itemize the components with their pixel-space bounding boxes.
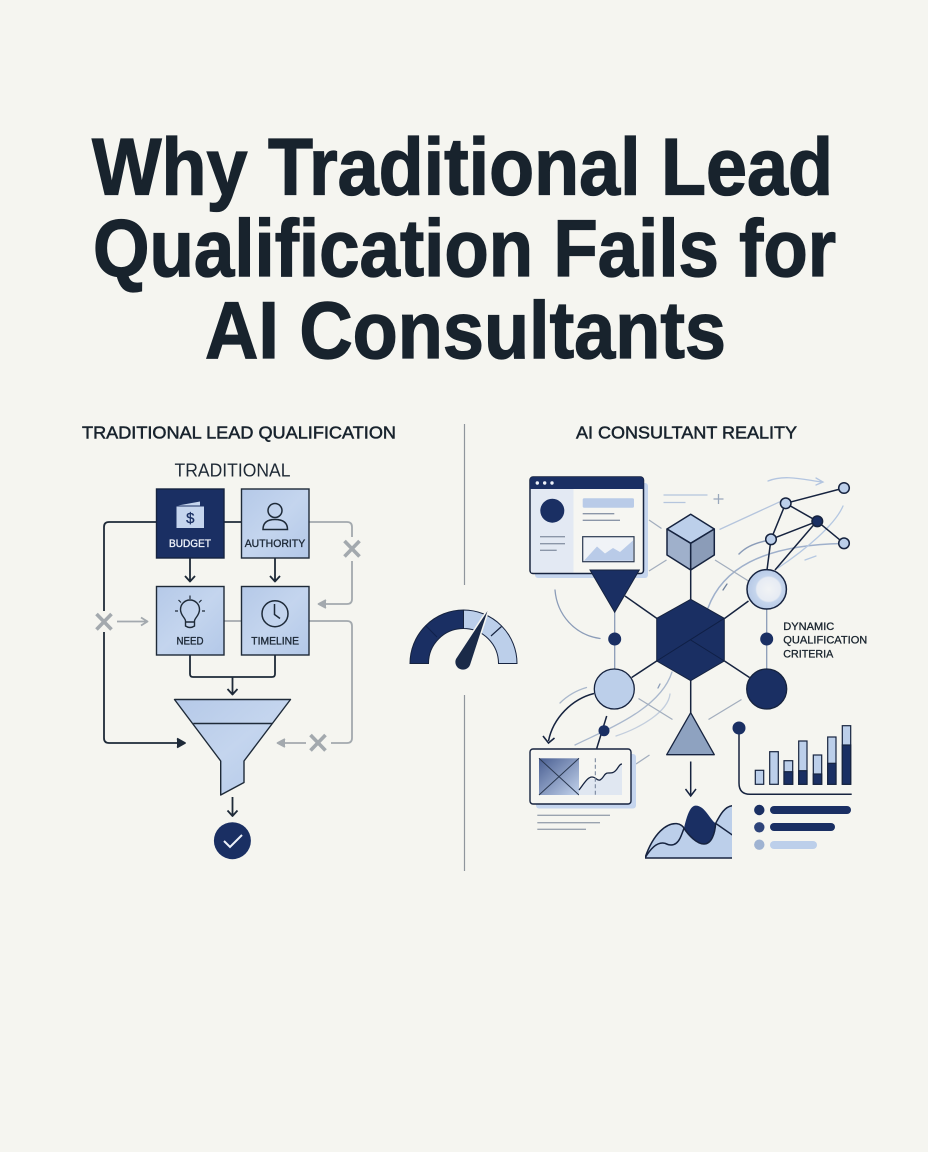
heading: traditional lead qualification: TRADITIONAL LEAD QUALIFICATION (82, 422, 396, 442)
box: authority (242, 489, 309, 558)
icon: inverted triangle (590, 570, 639, 612)
bar chart (732, 722, 852, 794)
box: budget: BUDGET (169, 538, 211, 550)
panel: AI consultant network diagram (530, 477, 867, 858)
caption lines under chart card (537, 815, 610, 829)
box: need (156, 586, 224, 655)
area chart (645, 806, 733, 858)
title: Why Traditional Lead (92, 122, 833, 212)
icon: x mark right top (344, 541, 360, 556)
node: small dot left (608, 632, 621, 646)
decorative curves (555, 478, 843, 745)
box: timeline (242, 586, 309, 655)
icon: gauge (410, 610, 517, 670)
connector lines: light (615, 494, 780, 764)
icon: central hexagon (657, 599, 724, 681)
connectors: dark flow lines (104, 522, 280, 816)
text: dynamic qualification criteria: CRITERIA (783, 648, 834, 660)
text: dynamic qualification criteria: QUALIFICATION (783, 635, 867, 647)
box: authority: AUTHORITY (245, 538, 306, 550)
node: small dot right (760, 632, 773, 646)
node network (766, 483, 849, 549)
title: Qualification Fails for (93, 204, 836, 294)
icon: upright triangle (667, 713, 714, 755)
connector lines: dark (543, 521, 817, 796)
box: budget (156, 489, 224, 558)
icon: funnel (174, 700, 290, 795)
icon: check circle (214, 822, 251, 859)
text: dynamic qualification criteria: DYNAMIC (783, 621, 834, 633)
icon: x mark left (96, 614, 112, 630)
heading: AI consultant reality: AI CONSULTANT REALITY (576, 422, 797, 442)
connectors: grey rejected lines (117, 522, 352, 747)
icon: x mark right bottom (310, 735, 326, 750)
icon: cube (667, 514, 714, 570)
node: dark circle (747, 669, 787, 709)
node: small dot lower (598, 725, 610, 736)
label: traditional: TRADITIONAL (174, 460, 290, 480)
center divider (464, 424, 466, 871)
text: dynamic qualification criteria (783, 621, 867, 660)
window mockup (530, 477, 648, 578)
box: need: NEED (176, 635, 204, 647)
panel: traditional flowchart (96, 460, 360, 859)
node: light circle (594, 669, 634, 709)
title: AI Consultants (205, 286, 726, 376)
legend (754, 805, 851, 850)
chart card (530, 749, 636, 808)
box: timeline: TIMELINE (251, 635, 299, 647)
node: ring circle (747, 570, 786, 609)
box: budget: $ (186, 510, 195, 527)
title (92, 122, 836, 376)
